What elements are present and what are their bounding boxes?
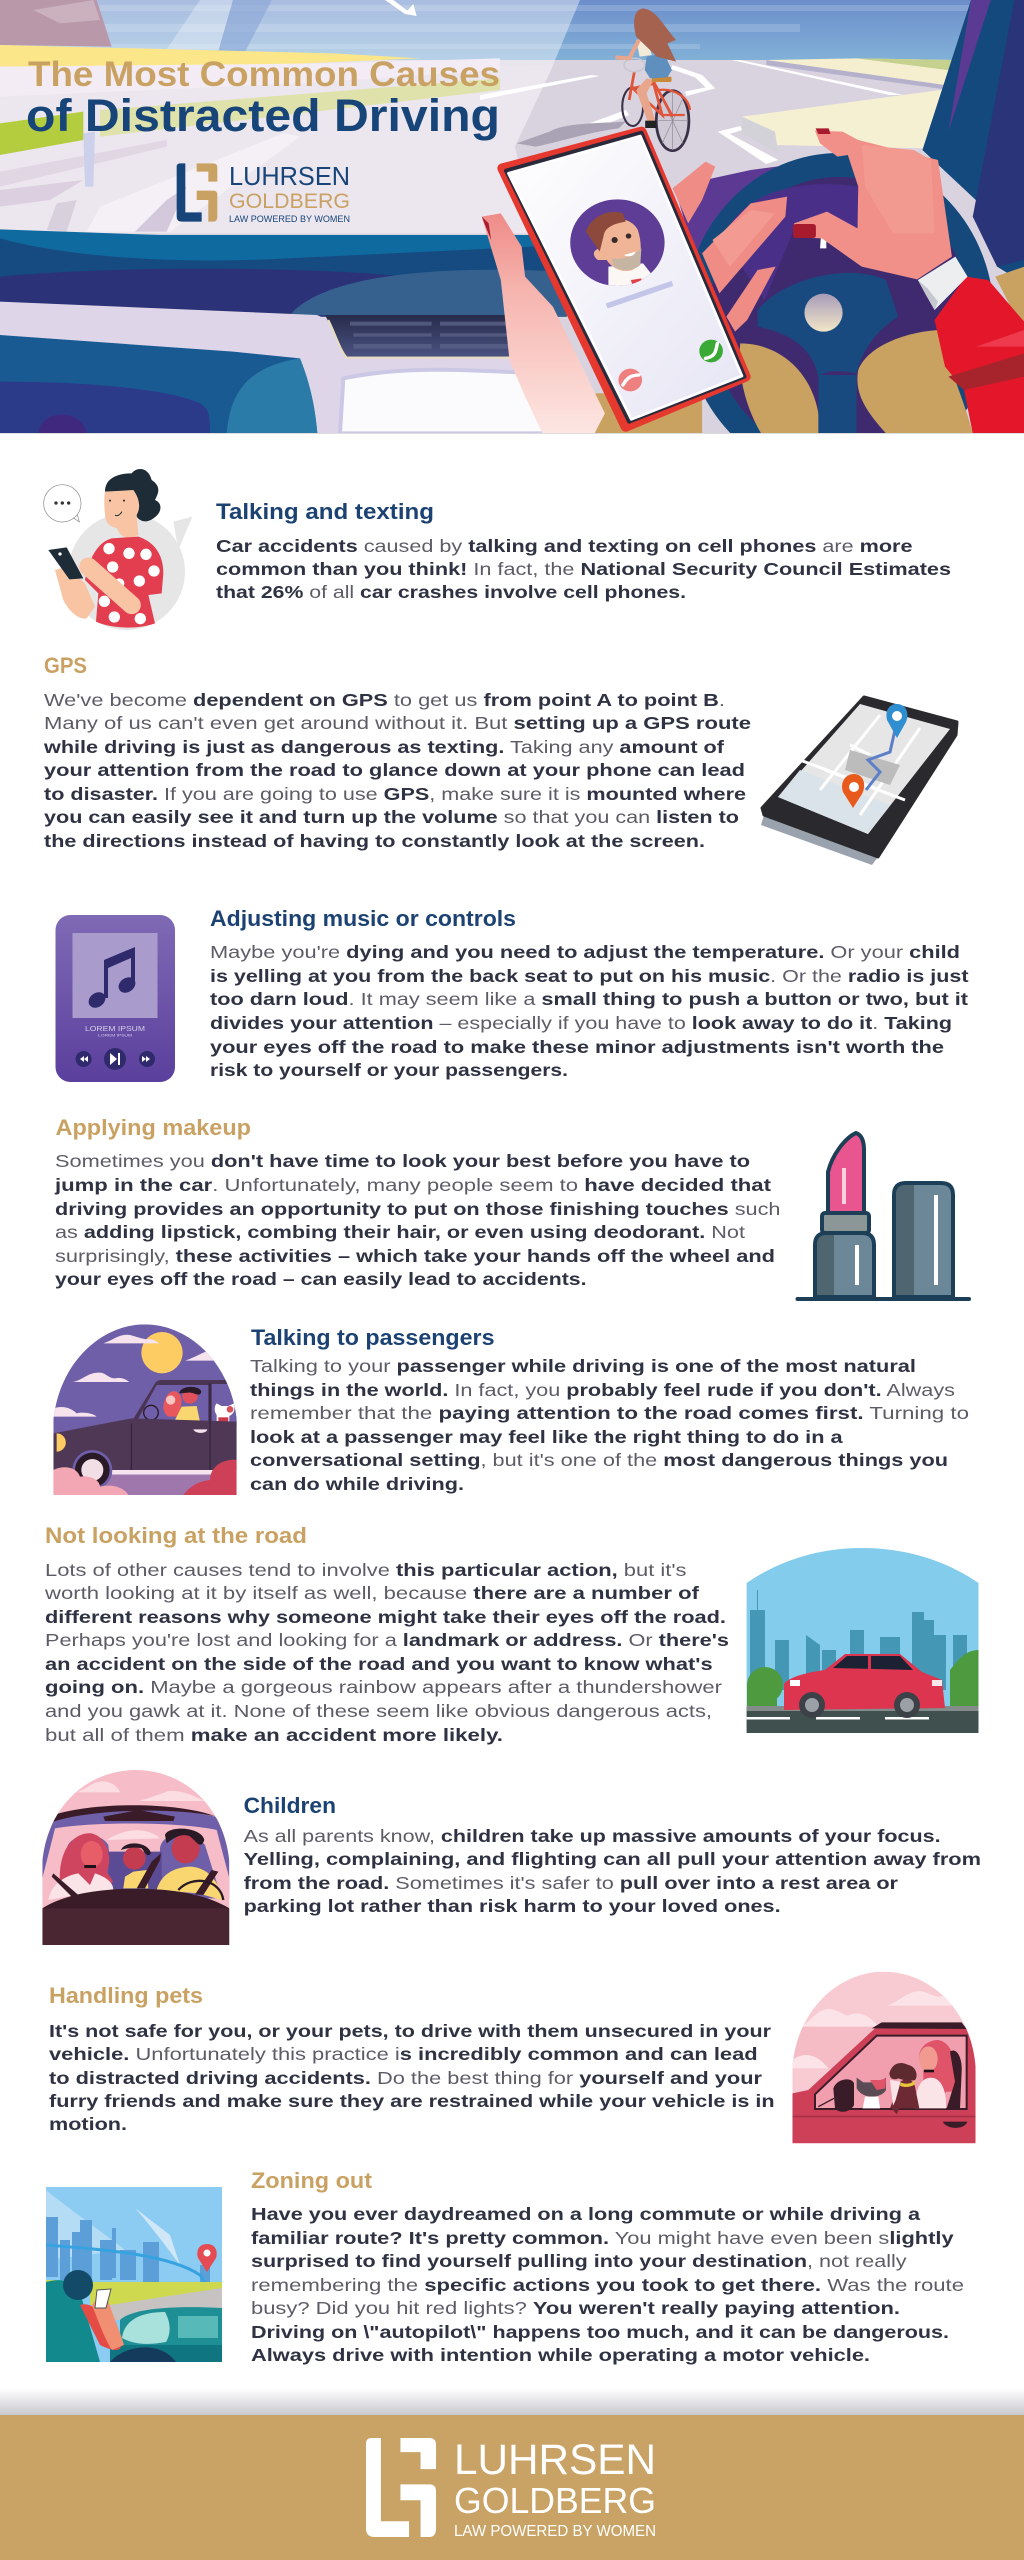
icon: lipstick [796, 1133, 971, 1301]
panel: talking to passengers [53, 1324, 969, 1496]
icon: cyclist on the road [615, 8, 690, 151]
logo: Luhrsen Goldberg header: LAW POWERED BY WOMEN [229, 214, 350, 225]
text block: as adding lipstick, combing their hair, or even using deodorant. Not [55, 1222, 745, 1242]
text block: worth looking at it by itself as well, because there are a number of [44, 1583, 699, 1603]
heading: Not looking at the road [45, 1523, 307, 1548]
text block: surprisingly, these activities – which take your hands off the wheel and [55, 1246, 775, 1266]
footer band with logo [0, 2415, 1024, 2560]
text block: Always drive with intention while operating a motor vehicle. [251, 2345, 870, 2365]
text block: common than you think! In fact, the National Security Council Estimates [216, 559, 951, 579]
text block [250, 1356, 969, 1494]
text block: your attention from the road to glance down at your phone can lead [44, 760, 745, 780]
logo: Luhrsen Goldberg footer [366, 2436, 656, 2540]
text block: Sometimes you don't have time to look your best before you have to [55, 1151, 750, 1171]
icon: left hand palm [482, 213, 605, 433]
title: The Most Common Causes [28, 55, 500, 94]
text block: and you gawk at it. None of these seem like obvious dangerous acts, [45, 1701, 712, 1721]
title: of Distracted Driving [26, 90, 500, 141]
text block: look at a passenger may feel like the right thing to do in a [250, 1427, 843, 1447]
text block: motion. [49, 2114, 127, 2134]
text block: As all parents know, children take up massive amounts of your focus. [244, 1826, 941, 1846]
illustration: family in car [42, 1770, 229, 1945]
text block: Lots of other causes tend to involve this particular action, but it's [45, 1560, 687, 1580]
text block: different reasons why someone might take their eyes off the road. [45, 1607, 726, 1627]
illustration: couple in car at sunset [53, 1324, 240, 1496]
panel: handling pets [49, 1972, 976, 2143]
hero illustration: driver holding phone [0, 0, 1024, 468]
text block [44, 1560, 729, 1745]
text block [54, 1151, 781, 1289]
icon: red decline button [618, 369, 642, 391]
text block: remembering the specific actions you took to get there. Was the route [251, 2275, 964, 2295]
heading: Talking to passengers [251, 1325, 494, 1350]
text block: from the road. Sometimes it's safer to pull over into a rest area or [244, 1873, 898, 1893]
text block: jump in the car . Unfortunately, many people seem to have decided that [54, 1175, 771, 1195]
text block [216, 536, 951, 602]
text block: divides your attention – especially if you have to look away to do it . Taking [210, 1013, 952, 1033]
text block: Perhaps you're lost and looking for a landmark or address. Or there's [45, 1630, 729, 1650]
text block: to disaster. If you are going to use GPS , make sure it is mounted where [44, 784, 746, 804]
text block: Yelling, complaining, and flighting can all pull your attention away from [244, 1849, 981, 1869]
panel: adjusting music or controls [56, 906, 969, 1082]
panel: zoning out [46, 2168, 964, 2365]
icon: woman texting on phone [44, 469, 192, 630]
icon: green answer button [699, 340, 723, 362]
icon: music player card: LOREM IPSUM [85, 1026, 145, 1033]
text block: Talking to your passenger while driving is one of the most natural [250, 1356, 916, 1376]
heading: Handling pets [49, 1983, 203, 2008]
heading: Talking and texting [216, 499, 434, 524]
panel: children [42, 1770, 981, 1945]
text block: conversational setting , but it's one of the most dangerous things you [250, 1450, 948, 1470]
logo: Luhrsen Goldberg header: LUHRSEN [229, 161, 350, 191]
heading: GPS [44, 653, 87, 678]
text block: Many of us can't even get around without it. But setting up a GPS route [44, 713, 751, 733]
text block: parking lot rather than risk harm to your loved ones. [244, 1896, 781, 1916]
text block: surprised to find yourself pulling into your destination , not really [251, 2251, 907, 2271]
text block: We've become dependent on GPS to get us from point A to point B . [44, 690, 725, 710]
text block [251, 2204, 964, 2365]
text block: can do while driving. [250, 1474, 464, 1494]
panel: applying makeup [54, 1115, 971, 1301]
text block: risk to yourself or your passengers. [210, 1060, 568, 1080]
text block: too darn loud . It may seem like a small thing to push a button or two, but it [210, 989, 968, 1009]
illustration: woman driving with pets [792, 1972, 976, 2143]
text block: your eyes off the road – can easily lead to accidents. [55, 1269, 586, 1289]
panel: GPS [43, 653, 957, 865]
text block: the directions instead of having to constantly look at the screen. [44, 831, 705, 851]
text block: familiar route? It's pretty common. You might have even been s lightly [251, 2228, 954, 2248]
text block: Car accidents caused by talking and texting on cell phones are more [216, 536, 913, 556]
text block: is yelling at you from the back seat to put on his music . Or the radio is just [210, 966, 969, 986]
text block: you can easily see it and turn up the volume so that you can listen to [44, 807, 739, 827]
text block [43, 690, 751, 851]
text block: while driving is just as dangerous as texting. Taking any amount of [43, 737, 724, 757]
text block: an accident on the side of the road and you want to know what's [45, 1654, 713, 1674]
text block: things in the world. In fact, you probably feel rude if you don't. Always [250, 1380, 955, 1400]
icon: smartphone with map pins [761, 697, 957, 865]
right scene, wheel, hands and phone [480, 0, 1024, 468]
text block: Have you ever daydreamed on a long commute or while driving a [251, 2204, 920, 2224]
text block: It's not safe for you, or your pets, to drive with them unsecured in your [49, 2021, 771, 2041]
text block: to distracted driving accidents. Do the best thing for yourself and your [49, 2068, 762, 2088]
text block [244, 1826, 981, 1916]
text block: furry friends and make sure they are restrained while your vehicle is in [49, 2091, 775, 2111]
text block: but all of them make an accident more likely. [45, 1725, 503, 1745]
title [26, 55, 500, 141]
logo: Luhrsen Goldberg footer: GOLDBERG [454, 2480, 656, 2521]
text block: going on. Maybe a gorgeous rainbow appears after a thundershower [45, 1677, 722, 1697]
panel: talking and texting [44, 469, 951, 630]
text block: busy? Did you hit red lights? You weren't really paying attention. [251, 2298, 900, 2318]
text block: Driving on \"autopilot\" happens too much, and it can be dangerous. [251, 2322, 949, 2342]
text block: that 26% of all car crashes involve cell phones. [216, 582, 686, 602]
text block: remember that the paying attention to the road comes first. Turning to [250, 1403, 969, 1423]
illustration: driver looking at phone [46, 2187, 222, 2362]
heading: Applying makeup [56, 1115, 251, 1140]
heading: Children [244, 1793, 336, 1818]
icon: music player card [56, 915, 175, 1082]
text block: vehicle. Unfortunately this practice i s incredibly common and can lead [49, 2044, 758, 2064]
text block: your eyes off the road to make these minor adjustments isn't worth the [210, 1037, 944, 1057]
panel: not looking at the road [44, 1523, 979, 1745]
logo: Luhrsen Goldberg footer: LUHRSEN [454, 2436, 656, 2484]
text block: driving provides an opportunity to put on those finishing touches such [55, 1199, 781, 1219]
illustration: red car in the city [746, 1548, 979, 1733]
logo: Luhrsen Goldberg header [177, 161, 350, 225]
logo: Luhrsen Goldberg footer: LAW POWERED BY WOMEN [454, 2523, 656, 2540]
left scene and dashboard [0, 0, 567, 433]
logo: Luhrsen Goldberg header: GOLDBERG [229, 190, 350, 213]
icon: smartphone with incoming call [503, 132, 745, 427]
heading: Adjusting music or controls [210, 906, 516, 931]
text block: Maybe you're dying and you need to adjust the temperature. Or your child [210, 942, 960, 962]
heading: Zoning out [251, 2168, 373, 2193]
icon: music player card: LOREM IPSUM [98, 1032, 132, 1038]
text block [49, 2021, 775, 2134]
text block [210, 942, 969, 1080]
